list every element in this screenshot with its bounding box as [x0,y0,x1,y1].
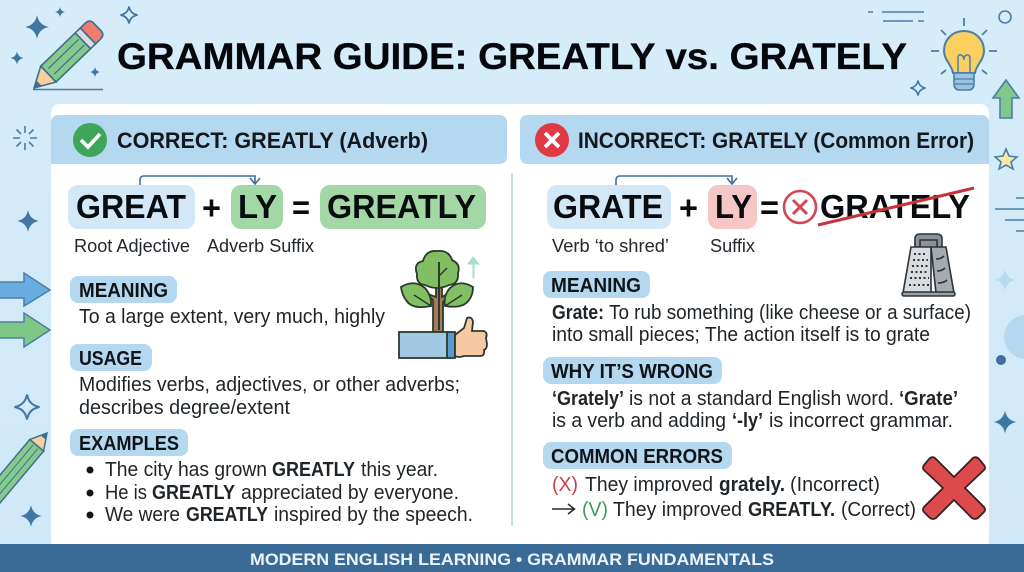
text: why it's wrong: ‘Grately’ [552,388,624,410]
word: LY [231,185,283,229]
heading: incorrect: INCORRECT: GRATELY (Common Error) [578,128,974,153]
chip: meaning: MEANING [551,275,641,297]
divider [511,173,513,526]
chip: why it's wrong: WHY IT’S WRONG [551,361,713,383]
title: GRAMMAR GUIDE: GREATLY vs. GRATELY [117,36,907,77]
text: why it's wrong: ‘-ly’ [732,410,763,432]
equals: = [292,189,310,226]
icon: tree and thumbs up [399,251,487,358]
list: examples: GREATLY [272,459,356,481]
list: examples: appreciated by everyone. [241,482,459,504]
text: why it's wrong: ‘Grate’ [899,388,958,410]
equals: = [760,189,779,226]
text: common errors: (V) [582,499,608,521]
text: common errors: grately. [719,474,785,496]
text: usage [79,374,460,419]
text: common errors: (Incorrect) [790,474,880,496]
text: common errors: GREATLY. [748,499,835,521]
word: GRATE: GRATE [553,188,663,225]
icon: outline sparkle by bulb [910,80,926,96]
footer bar: MODERN ENGLISH LEARNING • GRAMMAR FUNDAMENTALS [250,550,774,569]
list: examples: this year. [361,459,438,481]
word: LY [708,185,757,229]
plus: + [679,189,698,226]
text: why it's wrong: is incorrect grammar. [769,410,953,432]
text: meaning: To a large extent, very much, highly [79,306,385,328]
list: examples [86,459,473,526]
icon: outline sparkle left [14,394,40,420]
word: LY: LY [238,188,277,225]
chip: common errors: COMMON ERRORS [551,446,723,468]
icon: green up arrow [993,80,1019,118]
text: why it's wrong [552,388,958,432]
word: GREATLY: GREATLY [327,188,476,225]
icon: green pencil left [0,427,54,505]
chip: examples: EXAMPLES [79,433,179,455]
word: GREAT: GREAT [76,188,186,225]
icon: burst [13,126,37,150]
text: common errors [552,474,916,521]
list: examples: GREATLY [186,504,269,526]
icon: right edge sparkles and dots [994,269,1024,434]
text: meaning: To rub something (like cheese or a surface) [609,302,971,324]
text: why it's wrong: is not a standard English word. [629,388,894,410]
text: meaning [552,302,971,346]
list: examples: He is [105,482,147,504]
label: suffix: Suffix [710,236,755,256]
text: common errors: They improved [585,474,713,496]
icon: large red cross [923,457,985,519]
icon: green arrow [0,313,50,347]
icon: cheese grater [902,234,955,296]
icon: sparkle left [17,210,39,232]
chip: meaning: MEANING [79,280,168,302]
icon: decorative lines right [995,198,1024,231]
label: root adjective: Root Adjective [74,236,190,256]
icon: yellow star [995,149,1017,169]
icon: green check [73,123,107,157]
list: examples: inspired by the speech. [274,504,473,526]
text: usage: describes degree/extent [79,397,290,419]
panel: main white card [51,104,989,544]
text: common errors: (X) [552,474,578,496]
text: meaning: Grate: [552,302,604,324]
label: adverb suffix: Adverb Suffix [207,236,314,256]
word: GRATELY struck through: GRATELY [820,188,970,225]
text: why it's wrong: is a verb and adding [552,410,726,432]
list: examples: We were [105,504,180,526]
text: common errors: (Correct) [841,499,916,521]
list: examples: GREATLY [152,482,236,504]
footer bar [0,544,1024,572]
text: meaning: into small pieces; The action itself is to grate [552,324,930,346]
list: examples: The city has grown [105,459,267,481]
icon: red x [535,123,569,157]
icon: sparkle stars top left [10,6,138,77]
panel: incorrect [520,115,989,521]
icon: decorative lines top right [868,12,924,21]
icon: light bulb [931,11,1011,90]
header bar: correct [51,115,507,164]
icon: sparkle bottom left [20,505,42,527]
plus: + [202,189,221,226]
text: common errors: They improved [613,499,742,521]
word: LY: LY [715,188,752,225]
connector arrow [140,176,260,185]
icon: pencil top left [26,19,105,96]
icon: circled x [784,191,816,223]
label: verb to shred: Verb ‘to shred’ [552,236,669,256]
heading: correct: CORRECT: GREATLY (Adverb) [117,128,428,153]
icon: blue arrow [0,273,50,306]
connector arrow [616,176,737,185]
text: usage: Modifies verbs, adjectives, or other adverbs; [79,374,460,396]
header bar: incorrect [520,115,989,164]
chip: usage: USAGE [79,348,142,370]
panel: correct [51,115,507,526]
